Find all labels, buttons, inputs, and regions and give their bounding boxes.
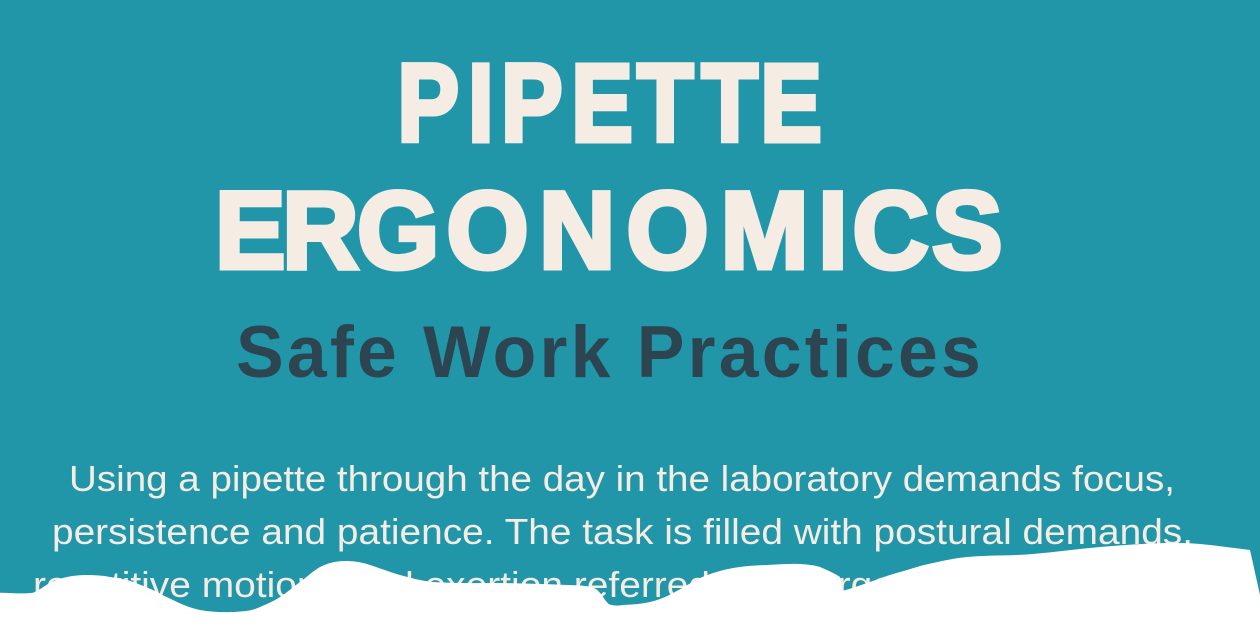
intro paragraph: Using a pipette through the day in the laboratory demands focus, (69, 458, 1175, 499)
title: PIPETTE (397, 41, 822, 165)
torn paper edge (0, 543, 1260, 630)
title: ERGONOMICS (215, 168, 1002, 291)
intro paragraph (33, 458, 1193, 605)
intro paragraph: persistence and patience. The task is filled with postural demands, (52, 511, 1193, 552)
subtitle: Safe Work Practices (236, 312, 981, 393)
title (215, 41, 1002, 291)
intro paragraph: repetitive motions and exertion referred to as ergonomic hazards (33, 564, 1147, 605)
